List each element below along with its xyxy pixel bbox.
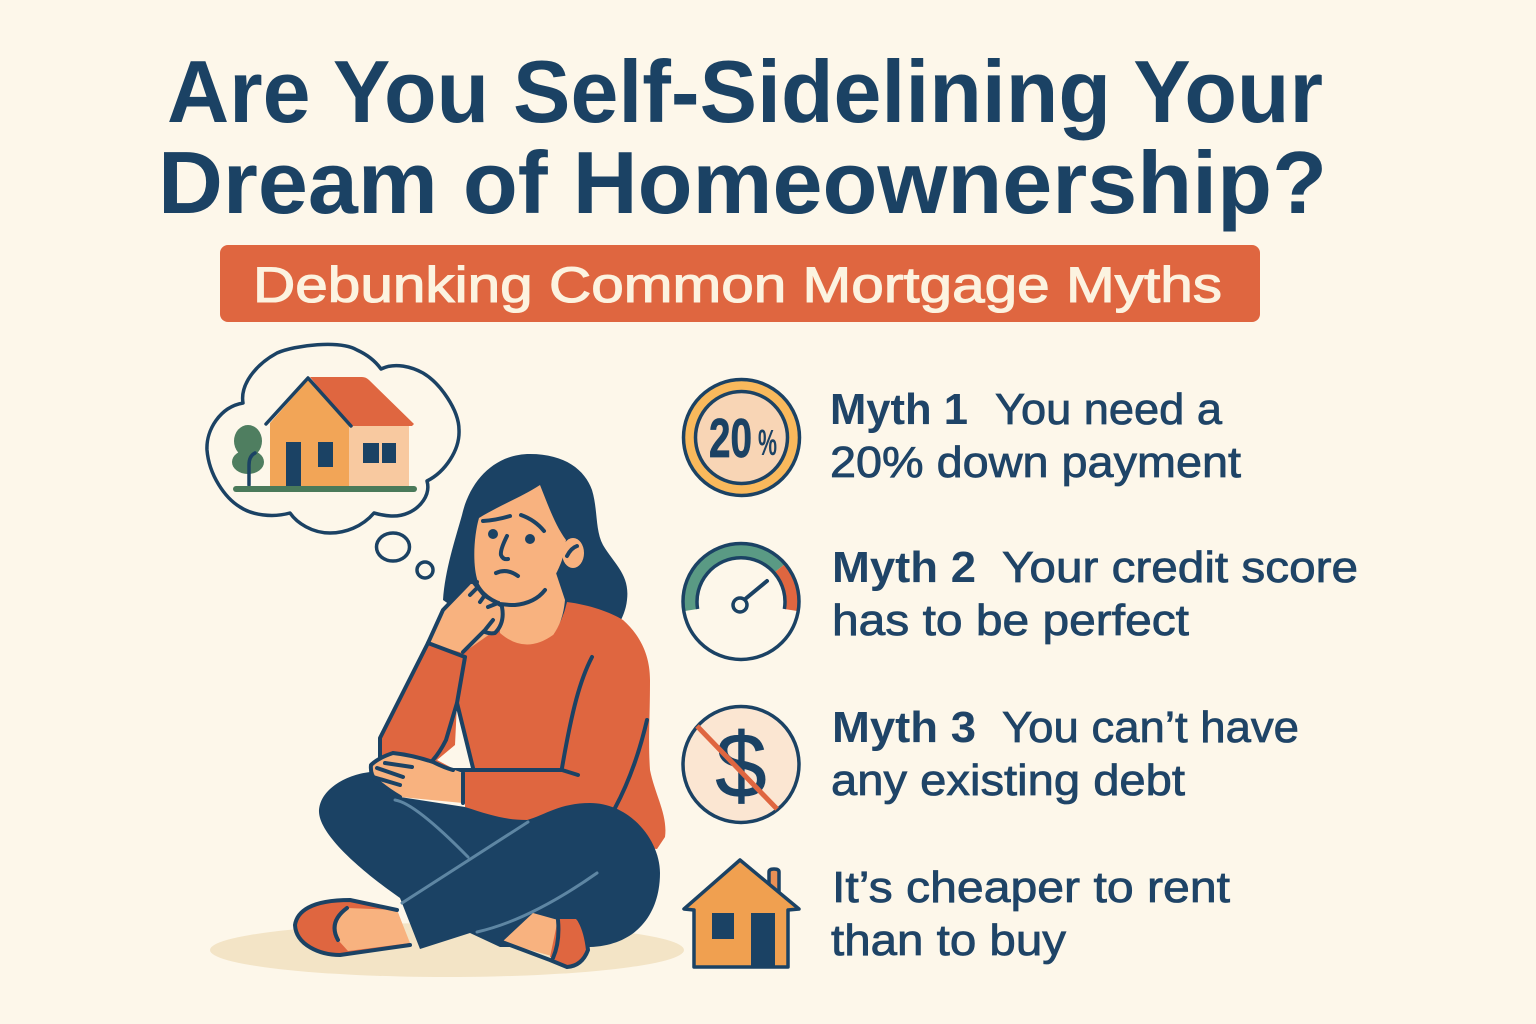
myth 2 text bbox=[832, 543, 1358, 645]
chin hand bbox=[428, 581, 503, 653]
myth 2 text: Myth 2 bbox=[832, 543, 976, 592]
myth 1 text bbox=[830, 385, 1241, 487]
myth 3 text: Myth 3 bbox=[832, 703, 976, 752]
myth 1: 20% icon: 20 bbox=[709, 407, 752, 469]
jeans seams bbox=[395, 800, 597, 932]
person thinking bbox=[295, 454, 665, 967]
myth 1 text: 20% down payment bbox=[830, 438, 1241, 487]
lower hand bbox=[370, 753, 463, 803]
myth 2 text: has to be perfect bbox=[832, 596, 1189, 645]
title: Are You Self-Sidelining Your bbox=[167, 42, 1323, 141]
sweater outlines bbox=[380, 643, 647, 808]
tree bbox=[232, 425, 264, 485]
ground bbox=[233, 486, 417, 492]
subtitle banner: Debunking Common Mortgage Myths bbox=[253, 257, 1222, 313]
subtitle banner bbox=[220, 245, 1260, 322]
ear bbox=[562, 538, 584, 568]
jeans bbox=[319, 772, 660, 949]
myth 3: crossed-out dollar icon: $ bbox=[715, 715, 767, 817]
thought bubble with dream house bbox=[207, 344, 459, 578]
myth 3 text: any existing debt bbox=[831, 756, 1185, 805]
title: Dream of Homeownership? bbox=[158, 133, 1327, 232]
cloud outline bbox=[207, 344, 459, 533]
myth 2 text: Your credit score bbox=[1002, 543, 1358, 592]
facial features bbox=[483, 515, 577, 605]
myth 1 text: You need a bbox=[995, 385, 1223, 434]
illustration: floor shadow bbox=[210, 923, 684, 977]
title bbox=[158, 42, 1327, 232]
myth 4 text: It’s cheaper to rent bbox=[832, 863, 1230, 912]
right foot bbox=[502, 913, 588, 967]
dream house bbox=[266, 377, 414, 486]
myth 1 text: Myth 1 bbox=[830, 385, 968, 434]
myth 4: house icon bbox=[684, 860, 799, 967]
neck bbox=[500, 570, 565, 645]
myth 2: credit gauge icon bbox=[683, 544, 799, 660]
myth 3 text: You can’t have bbox=[1002, 703, 1299, 752]
myth 1: 20% icon: % bbox=[758, 422, 777, 463]
face bbox=[474, 485, 566, 604]
gap between arm and torso bbox=[437, 703, 473, 768]
myth 4 text bbox=[831, 863, 1230, 965]
small thought circles bbox=[376, 533, 433, 578]
sweater bbox=[380, 602, 665, 849]
left foot bbox=[295, 900, 410, 955]
myth 3: crossed-out dollar icon bbox=[683, 706, 799, 822]
hair bbox=[443, 454, 627, 640]
myth 1: 20% icon bbox=[684, 380, 800, 496]
myth 4 text: than to buy bbox=[831, 916, 1066, 965]
myth 3 text bbox=[831, 703, 1299, 805]
